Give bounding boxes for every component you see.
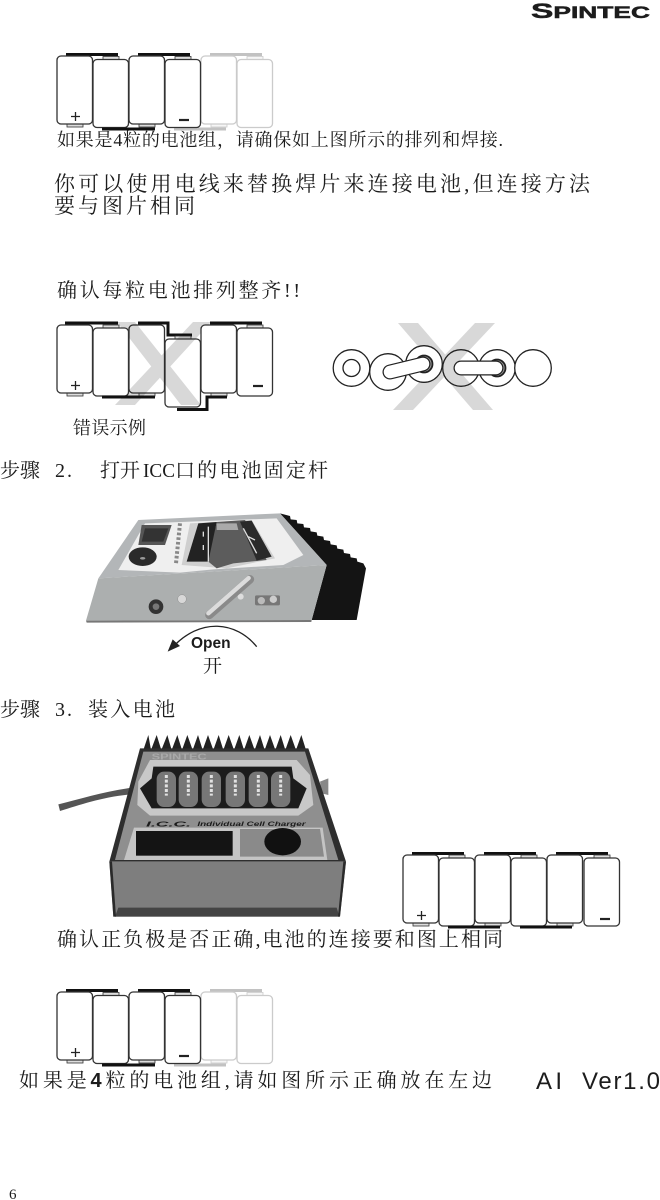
caption: 4-cell soldering: 如果是4粒的电池组，请确保如上图所示的排列和焊接. xyxy=(57,130,503,150)
step 2 heading: 口的电池固定杆 xyxy=(175,459,328,482)
caption: wrong example: 错误示例 xyxy=(73,418,146,438)
step 2 heading xyxy=(0,459,328,482)
step 2 heading: 步骤 xyxy=(0,459,40,482)
step 3 heading: 装入电池 xyxy=(88,698,175,721)
step 2 heading: 打开 xyxy=(100,459,140,482)
step 3 heading xyxy=(0,698,175,721)
step 3 heading: 3. xyxy=(55,699,72,721)
wrong example: ring connections xyxy=(333,323,551,410)
photo: charger with cells loaded xyxy=(58,735,346,917)
step 2 heading: 2. xyxy=(55,460,72,482)
version label xyxy=(536,1068,660,1095)
note: wire replacement xyxy=(54,172,591,218)
photo: charger with cells loaded: Individual Cell Charger xyxy=(197,821,306,828)
label: Open: Open xyxy=(191,635,231,652)
step 2 heading: ICC xyxy=(143,460,175,482)
heading: align cells: 确认每粒电池排列整齐!! xyxy=(57,279,300,302)
caption: 4-cell placement: 如果是4粒的电池组,请如图所示正确放在左边 xyxy=(19,1069,492,1092)
note: wire replacement: 要与图片相同 xyxy=(54,194,195,218)
battery pack: 4-cell bottom xyxy=(57,990,272,1065)
wrong example: misaligned battery pack xyxy=(57,322,272,410)
label: open in Chinese: 开 xyxy=(203,655,222,677)
battery pack: 4-cell top xyxy=(57,54,272,129)
step 3 heading: 步骤 xyxy=(0,698,40,721)
version label: AI xyxy=(536,1068,562,1095)
battery pack: 6-cell xyxy=(403,854,620,927)
note: wire replacement: 你可以使用电线来替换焊片来连接电池,但连接方法 xyxy=(54,172,591,196)
illustration: charger side view with open lever xyxy=(86,513,366,652)
caption: check polarity: 确认正负极是否正确,电池的连接要和图上相同 xyxy=(57,928,503,951)
version label: Ver1.0 xyxy=(582,1068,660,1095)
photo: charger with cells loaded: I.C.C. xyxy=(146,819,191,828)
logo: SPINTEC: S PINTEC xyxy=(531,0,650,23)
photo: charger with cells loaded: SPINTEC xyxy=(152,752,207,761)
